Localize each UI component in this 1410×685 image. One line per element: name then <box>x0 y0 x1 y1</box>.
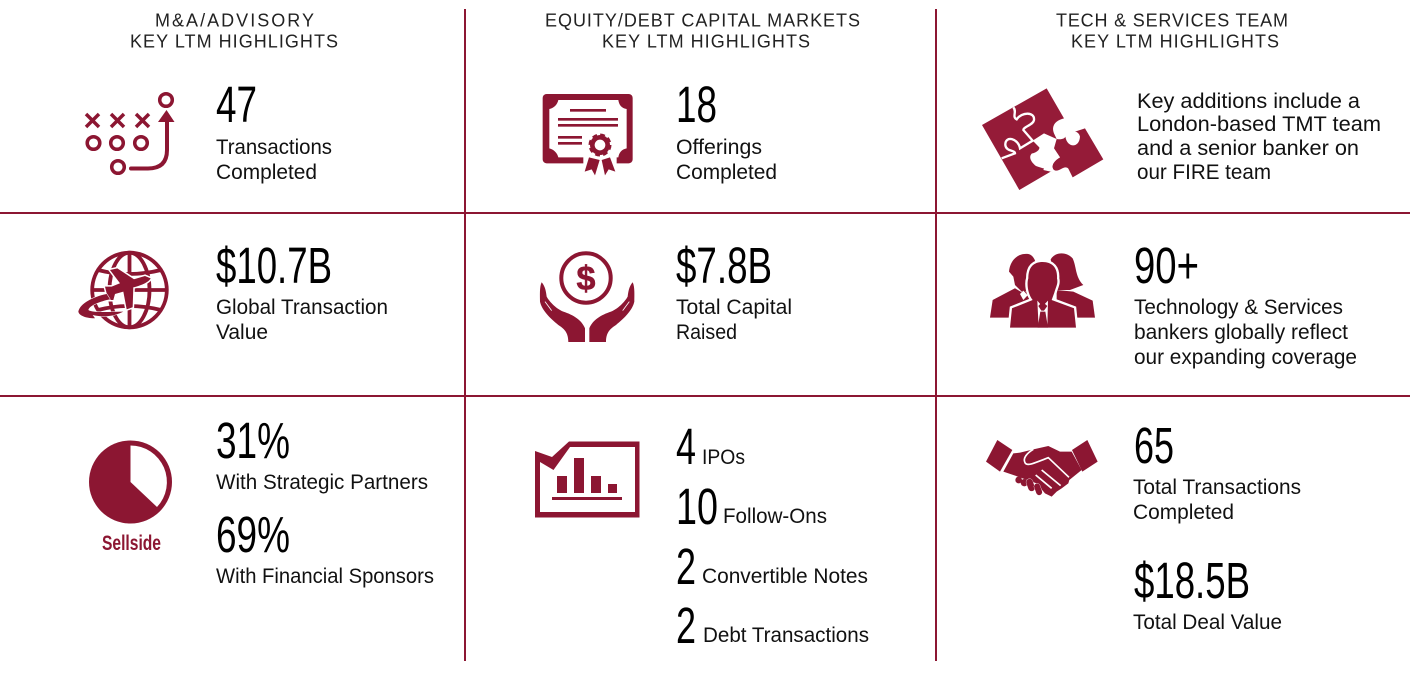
stat: 65 total transactions completed <box>1133 417 1301 524</box>
stat: 65 total transactions completed: Completed <box>1133 501 1234 524</box>
heading: M&A/Advisory: KEY LTM HIGHLIGHTS <box>130 32 338 52</box>
stat: offering counts by type: 2 <box>676 597 696 654</box>
stat: 31% with strategic partners: 31% <box>216 412 290 469</box>
stat: 90+ technology and services bankers: our expanding coverage <box>1134 346 1357 369</box>
stat: 65 total transactions completed: 65 <box>1134 417 1174 474</box>
stat: $7.8B total capital raised: $7.8B <box>676 237 772 294</box>
stat: offering counts by type: Debt Transactions <box>703 624 869 647</box>
stat: $10.7B global transaction value: Global Transaction <box>216 296 388 319</box>
stat: 90+ technology and services bankers: bankers globally reflect <box>1134 321 1348 344</box>
stat: $18.5B total deal value: Total Deal Value <box>1133 611 1282 634</box>
heading: Equity/Debt Capital Markets <box>545 10 860 52</box>
stat: $7.8B total capital raised <box>676 237 792 344</box>
stat: 47 transactions completed <box>216 76 332 184</box>
icon: sellside pie chart <box>89 440 172 555</box>
stat: 18 offerings completed: Completed <box>676 161 777 184</box>
stat: $10.7B global transaction value: $10.7B <box>216 237 332 294</box>
heading: M&A/Advisory: M&A/ADVISORY <box>155 10 314 30</box>
stat: offering counts by type: 4 <box>676 418 696 475</box>
stat: 69% with financial sponsors: 69% <box>216 506 290 563</box>
stat: 47 transactions completed: Transactions <box>216 136 332 159</box>
heading: M&A/Advisory <box>130 10 338 52</box>
stat: 90+ technology and services bankers: 90+ <box>1134 237 1199 294</box>
stat: offering counts by type <box>676 418 869 654</box>
stat: 18 offerings completed <box>676 76 777 184</box>
text: key additions <box>1137 90 1381 184</box>
stat: $7.8B total capital raised: Total Capital <box>676 296 792 319</box>
text: key additions: our FIRE team <box>1137 161 1271 184</box>
icon: stock chart certificate <box>535 442 640 518</box>
stat: offering counts by type: Convertible Notes <box>702 565 868 588</box>
stat: offering counts by type: 2 <box>676 538 696 595</box>
stat: 47 transactions completed: 47 <box>216 76 257 133</box>
stat: $10.7B global transaction value: Value <box>216 321 268 344</box>
stat: 69% with financial sponsors: With Financial Sponsors <box>216 565 434 588</box>
stat: 31% with strategic partners: With Strategic Partners <box>216 471 428 494</box>
stat: offering counts by type: Follow-Ons <box>723 505 827 528</box>
stat: offering counts by type: IPOs <box>702 446 745 469</box>
stat: 65 total transactions completed: Total Transactions <box>1133 476 1301 499</box>
text: key additions: and a senior banker on <box>1137 137 1359 160</box>
icon: hands holding coin <box>540 253 634 342</box>
icon: team of bankers <box>990 253 1095 328</box>
icon: hands holding coin: $ <box>577 260 596 298</box>
stat: offering counts by type: 10 <box>676 478 718 535</box>
stat: $18.5B total deal value: $18.5B <box>1134 552 1250 609</box>
stat: $18.5B total deal value <box>1133 552 1282 634</box>
stat: 18 offerings completed: Offerings <box>676 136 762 159</box>
icon: globe with airplane <box>78 252 167 328</box>
stat: 31% with strategic partners <box>216 412 428 494</box>
stat: 90+ technology and services bankers: Technology & Services <box>1134 296 1343 319</box>
icon: football play diagram <box>86 94 174 173</box>
icon: certificate <box>543 94 633 175</box>
stat: 69% with financial sponsors <box>216 506 434 588</box>
stat: 90+ technology and services bankers <box>1134 237 1357 369</box>
heading: Tech & Services Team: TECH & SERVICES TEAM <box>1056 10 1288 30</box>
icon: puzzle pieces <box>982 88 1103 190</box>
stat: $7.8B total capital raised: Raised <box>676 321 737 344</box>
icon: handshake <box>986 440 1098 497</box>
stat: 18 offerings completed: 18 <box>676 76 717 133</box>
text: key additions: London-based TMT team <box>1137 113 1381 136</box>
stat: 47 transactions completed: Completed <box>216 161 317 184</box>
heading: Equity/Debt Capital Markets: EQUITY/DEBT CAPITAL MARKETS <box>545 10 860 30</box>
heading: Tech & Services Team: KEY LTM HIGHLIGHTS <box>1071 32 1279 52</box>
icon: sellside pie chart: Sellside <box>102 532 161 555</box>
stat: $10.7B global transaction value <box>216 237 388 344</box>
heading: Tech & Services Team <box>1056 10 1288 52</box>
text: key additions: Key additions include a <box>1137 90 1360 113</box>
heading: Equity/Debt Capital Markets: KEY LTM HIGHLIGHTS <box>602 32 810 52</box>
